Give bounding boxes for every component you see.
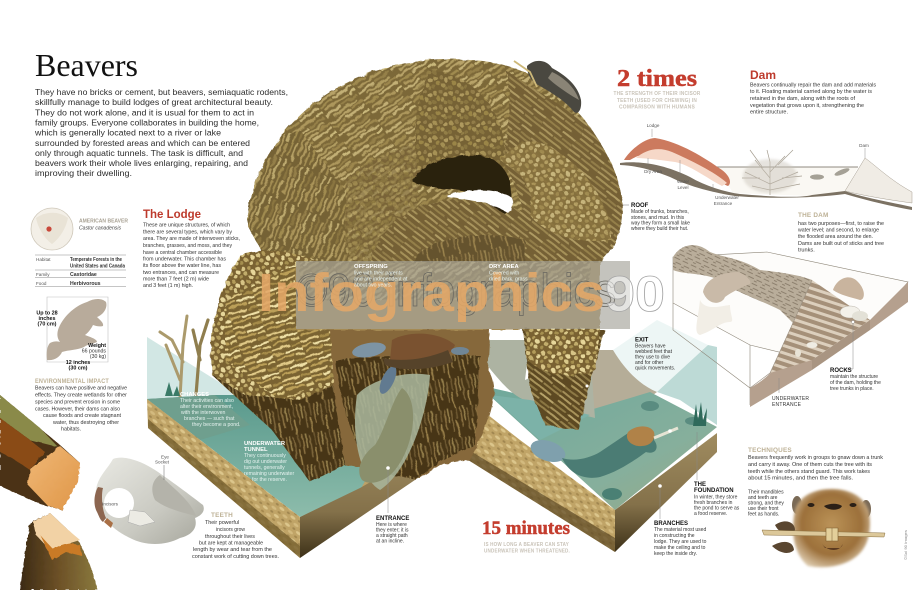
callout markers	[386, 384, 672, 488]
left water surface	[147, 395, 440, 517]
labels on lodge: OFFSPRING	[354, 264, 388, 270]
twig pile	[673, 245, 812, 323]
environmental impact text: ENVIRONMENTAL IMPACT	[35, 378, 109, 385]
bush	[742, 150, 802, 195]
species card: American beaver: Castoridae	[70, 272, 97, 278]
teeth text: length by wear and tear from the	[193, 547, 272, 553]
label: changes: they become a pond.	[192, 422, 240, 428]
the lodge text: two entrances, and can measure	[143, 270, 219, 276]
label: exit: EXIT	[635, 338, 649, 344]
species card: American beaver: AMERICAN BEAVER	[79, 218, 128, 224]
earth right front	[615, 433, 717, 552]
intro text: beavers work their whole lives enlarging, repairing, and	[35, 158, 248, 168]
environmental impact text	[35, 378, 127, 432]
size diagram: beaver silhouette	[36, 297, 108, 372]
the dam text: water level; and second, to enlarge	[797, 228, 879, 234]
label: changes: CHANGES	[180, 392, 209, 398]
intro text: skillfully manage to build lodges of great architectural beauty.	[35, 97, 273, 107]
stat: 2 times: TEETH (USED FOR CHEWING) IN	[617, 98, 697, 104]
chamber walls	[212, 375, 345, 482]
rocky back	[585, 350, 657, 420]
the lodge text: have a central chamber accessible	[143, 250, 222, 256]
label: the foundation: In winter, they store	[694, 494, 738, 500]
label: roof: stones, and mud. In this	[631, 215, 685, 221]
species card: American beaver: Temperate Forests in the	[70, 257, 122, 263]
upper trunk	[0, 395, 80, 510]
diagram: lodge and dam cross-section: Level	[678, 185, 688, 190]
label: rocks: maintain the structure	[830, 374, 878, 380]
sandy bank centre	[360, 350, 615, 518]
environmental impact text: cases. However, their dams can also	[35, 406, 120, 412]
intro text: family groups. Everyone collaborates in building the home,	[35, 118, 259, 128]
label: rocks: tree trunks in place.	[830, 386, 874, 392]
species card: American beaver: Herbivorous	[70, 281, 101, 287]
stat: 15 minutes: 15 minutes	[482, 518, 570, 539]
the lodge text: branches, grasses, and moss, and they	[143, 243, 232, 249]
label: the foundation: THE	[694, 482, 706, 488]
the lodge text: its floor above the water line, has	[143, 263, 221, 269]
the lodge text: area. They are made of interwoven sticks,	[143, 236, 240, 242]
rocks	[840, 306, 860, 318]
the lodge text: These are unique structures, of which	[143, 222, 230, 228]
the dam text	[797, 212, 884, 254]
size diagram: beaver silhouette: (30 kg)	[90, 354, 106, 360]
label: underwater tunnel: tunnels, generally	[244, 465, 285, 471]
label: branches: The material most used	[654, 527, 706, 533]
label: entrance: Here is where	[376, 522, 407, 528]
techniques text: Their mandibles	[748, 490, 784, 496]
techniques text: and carry it away. One of them cuts the tree with its	[748, 462, 872, 468]
illustration: beaver skull: Eye	[161, 454, 169, 460]
water back glow	[490, 395, 590, 440]
label: exit: and for other	[635, 360, 664, 366]
label: the foundation: the pond to serve as	[694, 506, 740, 512]
watermark band: ©90 infographics	[296, 264, 616, 316]
right water surface	[478, 385, 717, 510]
label: branches	[654, 488, 707, 557]
label: branches: lodge. They are used to	[654, 539, 707, 545]
teeth text: but are kept at manageable	[199, 540, 263, 546]
labels on lodge: DRY AREA	[489, 264, 520, 270]
teeth text: Their powerful	[205, 520, 239, 526]
size diagram: beaver silhouette: Weight	[88, 343, 106, 349]
side edges	[673, 303, 750, 405]
label: changes: with the interwoven	[181, 410, 226, 416]
the lodge text: more than 7 feet (2 m) wide	[143, 276, 209, 282]
label: roof: where they build their hut.	[631, 226, 688, 232]
label: underwater tunnel: They continuously	[244, 453, 286, 459]
left lobe, golden cut ends	[211, 251, 350, 440]
techniques text: teeth while the others stand guard. This work takes	[748, 469, 870, 475]
label: branches: keep the inside dry.	[654, 551, 697, 557]
swimming beaver	[528, 426, 678, 478]
diagram: lodge and dam cross-section: Entrance	[714, 201, 733, 206]
intro text: They have no bricks or cement, but beavers, semiaquatic rodents,	[35, 87, 288, 97]
diagram: lodge and dam cross-section: Water	[677, 179, 690, 184]
diagram: lodge and dam cross-section	[620, 123, 912, 210]
lodge dome	[247, 58, 624, 263]
label: exit: Beavers have	[635, 344, 666, 350]
intro text: surrounded by forested areas and which can be entered	[35, 138, 250, 148]
label: exit	[635, 338, 675, 372]
dam text: vegetation that grows upon it, strengthening the	[750, 103, 864, 109]
label: entrance: they enter; it is	[376, 528, 409, 534]
the dam text: Dams are built out of sticks and tree	[798, 241, 884, 247]
diagram: lodge and dam cross-section: Underwater	[715, 195, 739, 200]
label: exit: webbed feet that	[635, 349, 673, 355]
icon: range map globe	[31, 208, 73, 250]
teeth text: throughout their lives	[205, 534, 255, 540]
illustration: beaver head with stick	[762, 489, 885, 567]
lower lodge twig mass	[211, 251, 605, 482]
labels on lodge: and are independent at	[354, 276, 408, 282]
the lodge text: The Lodge	[143, 209, 201, 221]
label: changes: alter their environment,	[180, 404, 233, 410]
underwater tunnel	[355, 364, 430, 490]
size diagram: beaver silhouette: inches	[38, 316, 56, 322]
label: roof	[622, 203, 690, 232]
label: roof: ROOF	[631, 203, 649, 209]
stat: 2 times	[614, 66, 701, 110]
dam section	[845, 158, 912, 203]
dam text	[750, 70, 876, 116]
label: exit: they use to dive	[635, 354, 670, 360]
the lodge text: and 3 feet (1 m) high.	[143, 283, 193, 289]
back wall right	[613, 320, 708, 392]
environmental impact text: Beavers can have positive and negative	[35, 386, 127, 392]
labels on lodge: dried bark, grass	[489, 276, 528, 282]
label: underwater tunnel: TUNNEL	[244, 447, 268, 453]
label: branches: BRANCHES	[654, 521, 688, 527]
beaver on top of lodge	[514, 61, 581, 113]
small beavers	[810, 174, 824, 180]
stat: 2 times: THE STRENGTH OF THEIR INCISOR	[614, 91, 701, 97]
dam slope stripes	[770, 280, 870, 373]
label: rocks: ROCKS	[830, 368, 852, 374]
image credit: ©Sol 90 Images	[903, 530, 908, 560]
water and ground	[717, 167, 858, 196]
intro text: improving their dwelling.	[35, 168, 132, 178]
earth left front	[147, 399, 300, 558]
labels on lodge: live with their parents	[354, 270, 403, 276]
labels on lodge: Covered with	[489, 270, 519, 276]
earth centre front	[300, 442, 440, 558]
label: entrance: a straight path	[376, 533, 408, 539]
species card: American beaver: Castor canadensis	[79, 226, 121, 232]
beaver right	[833, 277, 864, 300]
label: the foundation	[694, 432, 740, 517]
label: underwater tunnel: UNDERWATER	[244, 441, 286, 447]
intro text: They do not work alone, and it is usual for them to act in	[35, 107, 254, 117]
stat: 15 minutes	[482, 518, 570, 554]
label: entrance	[376, 470, 409, 544]
label: underwater entrance	[772, 396, 809, 408]
right column	[523, 330, 605, 430]
techniques text: strong, and they	[748, 500, 784, 506]
intro text: only through aquatic tunnels. The task is difficult, and	[35, 148, 243, 158]
dam text: Beavers continually repair the dam and add materials	[750, 82, 876, 88]
label: branches: in constructing the	[654, 533, 695, 539]
dam text: to it. Floating material carried along by the water is	[750, 89, 872, 95]
label: the foundation: fresh branches in	[694, 500, 733, 506]
environmental impact text: species and prevent erosion in some	[35, 400, 120, 406]
environmental impact text: water, thus destroying other	[52, 420, 119, 426]
labels on lodge	[354, 264, 528, 288]
stat: 15 minutes: IS HOW LONG A BEAVER CAN STAY	[484, 542, 569, 548]
label: branches: make the ceiling and to	[654, 545, 706, 551]
label: entrance: at an incline.	[376, 538, 404, 544]
the lodge text: there are several types, which vary by	[143, 230, 232, 236]
teeth text: incisors grow	[216, 527, 246, 533]
the lodge text	[143, 209, 240, 289]
dam text: Dam	[750, 70, 776, 82]
the dam text: THE DAM	[798, 212, 829, 219]
label: exit: quick movements.	[635, 366, 675, 372]
teeth text	[192, 512, 279, 560]
water plant	[693, 402, 707, 426]
label: rocks: of the dam, holding the	[830, 380, 881, 386]
stat: 2 times: 2 times	[617, 66, 697, 92]
label: underwater entrance: ENTRANCE	[772, 402, 802, 408]
label: underwater tunnel	[244, 441, 294, 483]
size diagram: beaver silhouette: Up to 28	[36, 310, 58, 316]
techniques text: TECHNIQUES	[748, 447, 792, 454]
diagram labels: Lodge	[647, 123, 660, 128]
label: the foundation: a food reserve.	[694, 511, 727, 517]
label: underwater entrance: UNDERWATER	[772, 396, 809, 402]
dam text: entire structure.	[750, 110, 788, 116]
diagram: lodge and dam cross-section: Dry Area	[644, 169, 662, 174]
beavers in chamber	[351, 334, 469, 369]
illustration: beaver skull: Socket	[155, 460, 170, 464]
species card: American beaver: Food	[36, 281, 47, 286]
species card: American beaver	[31, 208, 128, 287]
illustration: beaver skull: Incisors	[102, 502, 119, 506]
environmental impact text: cause floods and create stagnant	[43, 413, 121, 419]
intro text	[34, 87, 288, 178]
top surface	[673, 252, 908, 360]
stones	[641, 401, 659, 411]
species card: American beaver: Family	[36, 272, 50, 277]
watermark band: Infographics	[258, 263, 605, 323]
size diagram: beaver silhouette: (70 cm)	[38, 322, 57, 328]
species card: American beaver: Habitat	[36, 257, 51, 262]
watermark band: 90	[605, 266, 665, 322]
label: underwater tunnel: remaining underwater	[244, 471, 294, 477]
environmental impact text: habitats.	[61, 426, 81, 432]
label: the foundation: FOUNDATION	[694, 488, 734, 494]
entrance hole	[413, 155, 513, 214]
the dam text: the flooded area around the den.	[798, 234, 873, 240]
the lodge text: from underwater. This chamber has	[143, 256, 226, 262]
label: underwater tunnel: dig out underwater	[244, 459, 287, 465]
title: Beavers	[35, 47, 138, 83]
dam text: retained in the dam, along with the roots of	[750, 96, 855, 102]
label: changes: Their activities can also	[180, 398, 234, 404]
techniques text: use their front	[748, 506, 779, 512]
labels on lodge: about two years.	[354, 282, 392, 288]
label: underwater tunnel: for the reserve.	[252, 477, 287, 483]
size diagram: beaver silhouette: (30 cm)	[69, 366, 88, 372]
label: entrance: ENTRANCE	[376, 516, 409, 522]
stat: 2 times: COMPARISON WITH HUMANS	[619, 104, 695, 110]
intro text: which is generally located next to a river or lake	[34, 128, 221, 138]
species card: American beaver: United States and Canada	[70, 264, 125, 270]
illustration: dam block	[673, 245, 908, 407]
techniques text: Beavers frequently work in groups to gnaw down a trunk	[748, 455, 883, 461]
back wall left	[147, 337, 235, 420]
techniques text: about 15 minutes, and then the tree falls.	[748, 476, 853, 482]
teeth text: TEETH	[211, 512, 233, 519]
size diagram: beaver silhouette: 66 pounds	[82, 348, 106, 354]
the dam text: has two purposes—first, to raise the	[798, 221, 884, 227]
illustration: gnawed tree trunk	[0, 395, 98, 590]
lower stump	[20, 513, 98, 590]
lodge section	[624, 138, 730, 186]
environmental impact text: effects. They create wetlands for other	[35, 392, 127, 398]
techniques text: and teeth are	[748, 495, 778, 501]
the dam text: trunks.	[798, 248, 815, 254]
dead trees	[160, 316, 208, 398]
earth strip	[870, 282, 908, 330]
stat: 15 minutes: UNDERWATER WHEN THREATENED.	[484, 548, 570, 554]
size diagram: beaver silhouette: 12 inches	[66, 360, 90, 366]
teeth text: constant work of cutting down trees.	[192, 554, 279, 560]
diagram: lodge and dam cross-section: Dam	[859, 143, 869, 148]
illustration: beaver skull	[94, 454, 204, 544]
label: changes	[180, 392, 240, 428]
techniques text: feet as hands.	[748, 512, 779, 518]
label: rocks	[830, 368, 881, 392]
main illustration: lodge cross-section block	[147, 316, 717, 558]
beaver left	[703, 272, 750, 303]
label: roof: way they form a small lake	[631, 220, 690, 226]
label: roof: Made of trunks, branches,	[631, 209, 689, 215]
techniques text	[748, 447, 883, 518]
label: changes: branches — such that	[184, 416, 235, 422]
